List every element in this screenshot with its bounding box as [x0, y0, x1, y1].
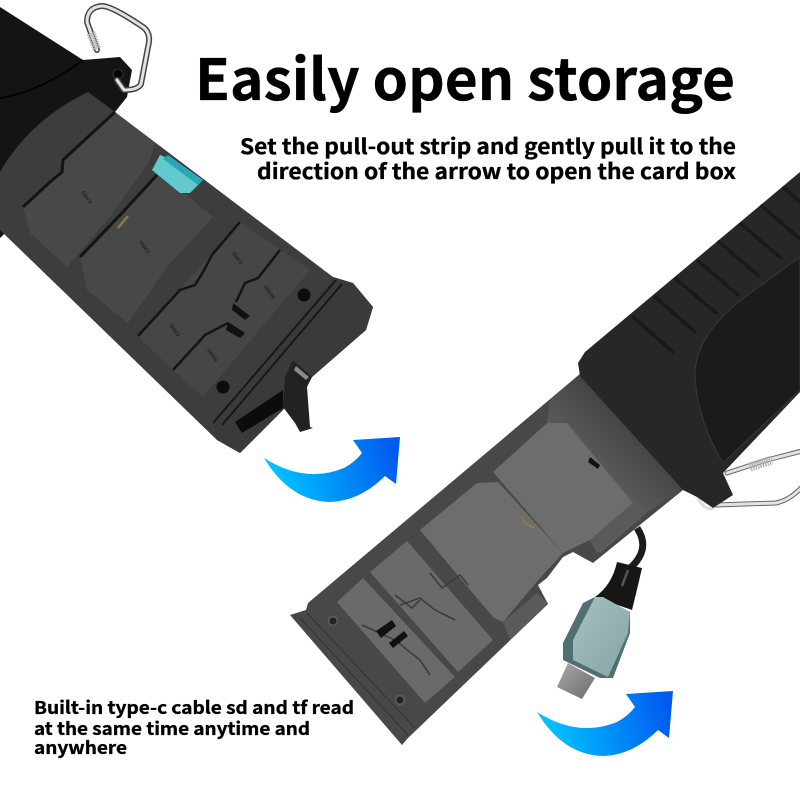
tray body: [0, 92, 373, 453]
sleeve curve line: [0, 60, 83, 98]
lower tab: [503, 593, 548, 640]
micro slot edges: [362, 573, 468, 675]
arrow: lower blue curved arrow: [537, 691, 673, 756]
micro slot notches: [226, 303, 250, 338]
gold contact: [118, 216, 128, 228]
subtitle: direction of the arrow to open the card box: [257, 156, 736, 186]
end plate seams: [300, 612, 415, 735]
SD slot one: [493, 423, 633, 553]
caption: type-c cable: [34, 695, 354, 760]
SD slot one: [23, 112, 155, 267]
SD slot two: [420, 482, 563, 622]
micro slot notches: [376, 620, 408, 648]
card labels: CARD: [138, 239, 152, 254]
card labels: CARD: [231, 250, 245, 265]
tray neck: [547, 368, 695, 553]
carabiner: lower: [698, 451, 800, 509]
plug metal tongue: [557, 663, 595, 699]
caption: type-c cable: at the same time anytime and: [34, 716, 310, 741]
type-c cable: [557, 528, 643, 699]
connector face: [573, 597, 630, 677]
card labels: [80, 189, 277, 362]
flange hole: [113, 69, 123, 79]
connector housing: [563, 597, 630, 678]
card labels: NANO: [263, 284, 277, 299]
micro-usb port: [588, 457, 600, 469]
caption: type-c cable: Built-in type-c cable sd and tf read: [34, 695, 354, 720]
SD slot two: [80, 173, 213, 323]
black sleeve: [578, 172, 800, 508]
subtitle: Set the pull-out strip and gently pull it to the: [240, 131, 736, 161]
black sleeve: [0, 7, 132, 238]
sleeve inner panel: [695, 257, 800, 463]
card labels: CARD: [80, 189, 94, 204]
subtitle: [240, 131, 736, 186]
end cap: [213, 277, 373, 453]
caption: type-c cable: anywhere: [34, 735, 127, 760]
gold contact: [522, 517, 535, 527]
arrow: upper blue curved arrow: [264, 437, 400, 502]
teal pull-out strip: [152, 155, 203, 193]
micro slot edges: [138, 222, 280, 370]
screw holes: [216, 288, 310, 394]
sleeve grip ridges: [633, 188, 800, 352]
SD slot one edge: [23, 112, 115, 207]
carabiner: upper: [87, 6, 149, 90]
pull-out latch: [235, 360, 313, 433]
end plate screw holes: [328, 616, 404, 704]
device: upper card box pulled open: [0, 6, 373, 453]
micro panel lower: [337, 578, 455, 703]
micro panel upper: [370, 541, 493, 672]
device: lower card box with type-c cable: [290, 172, 800, 745]
micro card panel: [138, 222, 310, 397]
card labels: NANO: [206, 347, 220, 362]
SD slot two edge: [80, 175, 157, 257]
title: Easily open storage: [195, 35, 735, 117]
cap seam: [213, 280, 342, 425]
tray body: [290, 368, 700, 745]
card labels: CARD: [168, 322, 182, 337]
lower neck tab: [590, 503, 647, 553]
